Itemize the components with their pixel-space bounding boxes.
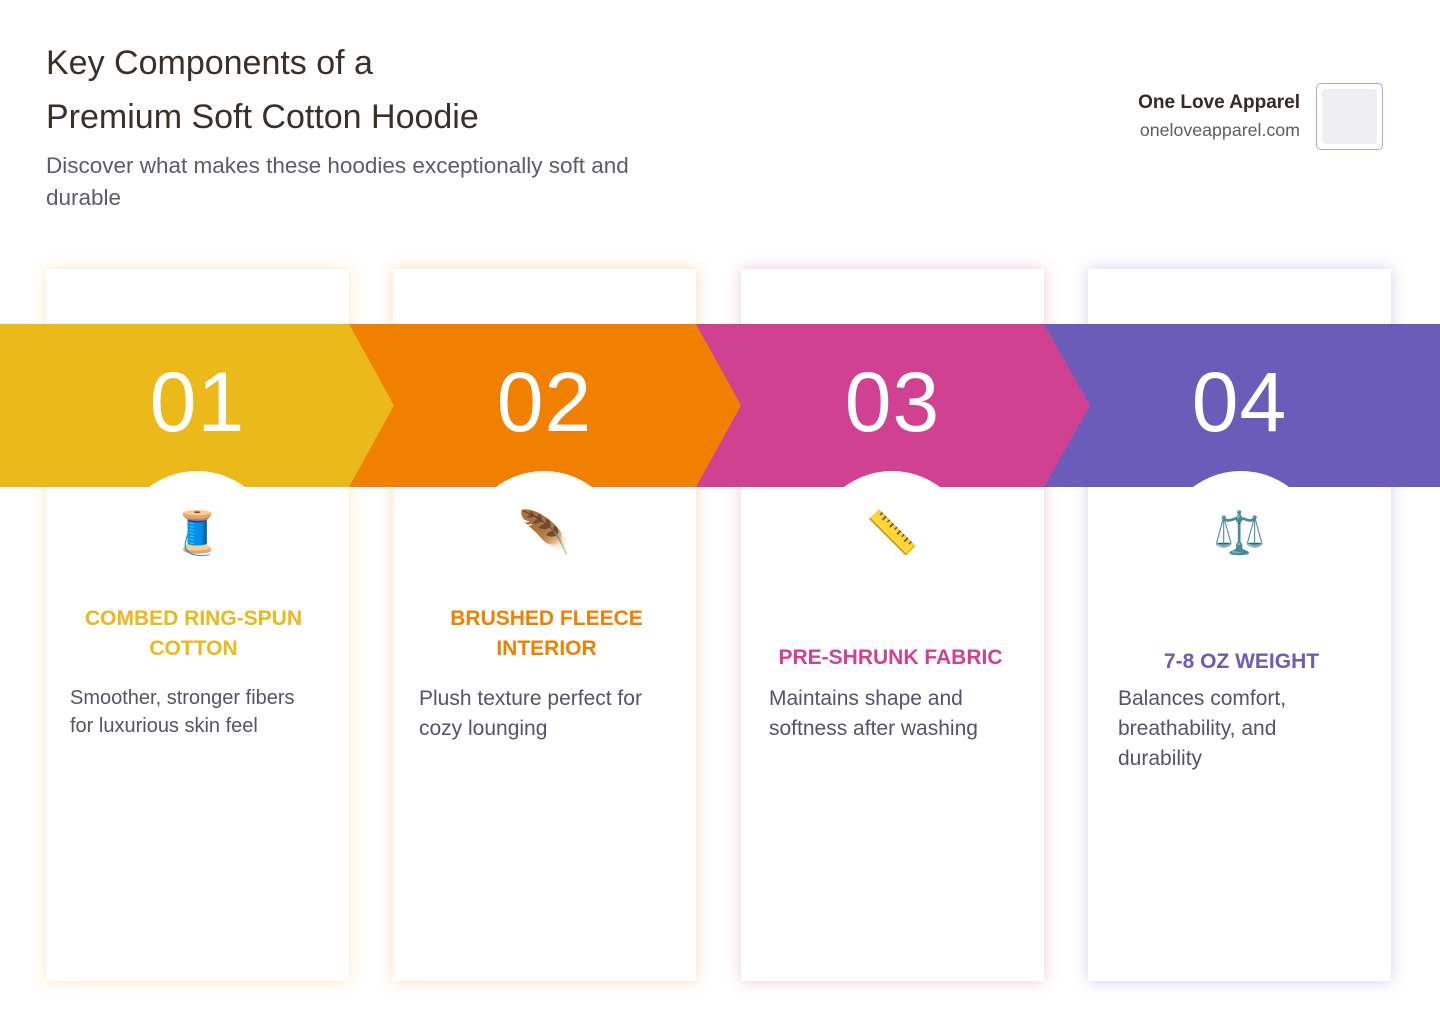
text: 04 bbox=[1192, 355, 1287, 449]
chevron band bbox=[0, 324, 1440, 487]
text 2: Plush texture perfect for cozy lounging bbox=[419, 687, 642, 740]
text: 02 bbox=[497, 355, 592, 449]
heading 3: PRE-SHRUNK FABRIC bbox=[778, 646, 1002, 669]
title: Key Components of a bbox=[46, 44, 373, 82]
text 4: Balances comfort, breathability, and durability bbox=[1118, 687, 1286, 770]
text: 01 bbox=[150, 355, 245, 449]
card 3 bbox=[741, 269, 1044, 981]
heading 1: COTTON bbox=[149, 637, 238, 660]
heading 2 bbox=[450, 607, 643, 660]
brand text bbox=[1138, 92, 1300, 140]
heading 4: 7-8 OZ WEIGHT bbox=[1164, 650, 1319, 673]
heading 2: BRUSHED FLEECE bbox=[450, 607, 643, 630]
heading 1 bbox=[85, 607, 302, 660]
brand text: One Love Apparel bbox=[1138, 92, 1300, 113]
text 1: Smoother, stronger fibers for luxurious skin feel bbox=[70, 687, 295, 737]
text: 03 bbox=[845, 355, 940, 449]
icon: feather: 🪶 bbox=[518, 509, 571, 556]
title: Premium Soft Cotton Hoodie bbox=[46, 98, 479, 136]
icon circles bbox=[149, 471, 1289, 487]
brand text: oneloveapparel.com bbox=[1140, 120, 1300, 140]
logo placeholder bbox=[1316, 83, 1383, 150]
icon: scales: ⚖️ bbox=[1213, 509, 1266, 556]
card 2 bbox=[393, 269, 696, 981]
heading 2: INTERIOR bbox=[496, 637, 597, 660]
icon: ruler: 📏 bbox=[866, 509, 919, 556]
title bbox=[46, 44, 479, 136]
card 4 bbox=[1088, 269, 1391, 981]
subtitle: Discover what makes these hoodies exceptionally soft and durable bbox=[46, 153, 629, 210]
numbers bbox=[150, 355, 1287, 449]
icon: spool: 🧵 bbox=[171, 509, 224, 556]
heading 1: COMBED RING-SPUN bbox=[85, 607, 302, 630]
card 1 bbox=[46, 269, 349, 981]
text 3: Maintains shape and softness after washing bbox=[769, 687, 978, 740]
